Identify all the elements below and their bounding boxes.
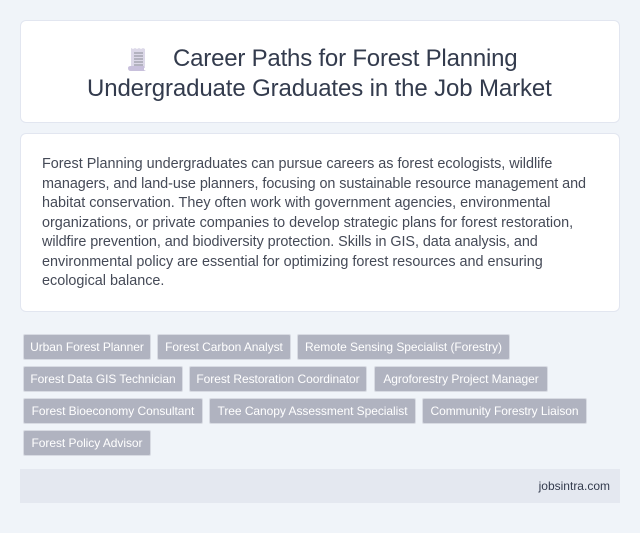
- tag: Agroforestry Project Manager: [383, 372, 539, 386]
- tag: [23, 366, 183, 392]
- tag: Forest Policy Advisor: [32, 436, 142, 450]
- tag: [374, 366, 548, 392]
- tag: Forest Bioeconomy Consultant: [32, 404, 194, 418]
- tags: career paths: [23, 334, 587, 456]
- text block: description: habitat conservation. They often work with government agencies, environmental: [42, 195, 550, 211]
- tag: [209, 398, 416, 424]
- text block: description: [42, 156, 586, 289]
- tag: Urban Forest Planner: [30, 340, 144, 354]
- text block: description: Forest Planning undergraduates can pursue careers as forest ecologists, wildlife: [42, 156, 552, 172]
- title: [87, 45, 552, 102]
- tag: [23, 334, 151, 360]
- tag: Remote Sensing Specialist (Forestry): [305, 340, 502, 354]
- tag: [189, 366, 367, 392]
- text block: description: environmental policy are essential for optimizing forest resources and ensuring: [42, 254, 543, 270]
- tag: [157, 334, 291, 360]
- text block: description: managers, and land-use planners, focusing on sustainable resource management and: [42, 176, 586, 192]
- text block: description: wildfire prevention, and biodiversity protection. Skills in GIS, data analysis, and: [42, 234, 538, 250]
- tag: [23, 398, 203, 424]
- icon: document scroll: [128, 48, 146, 71]
- tag: [297, 334, 510, 360]
- tag: Forest Restoration Coordinator: [196, 372, 360, 386]
- tag: Community Forestry Liaison: [430, 404, 579, 418]
- footer: [20, 469, 620, 503]
- panel: title card: [20, 20, 620, 123]
- tag: Forest Carbon Analyst: [165, 340, 283, 354]
- tag: Tree Canopy Assessment Specialist: [218, 404, 408, 418]
- tag: Forest Data GIS Technician: [30, 372, 176, 386]
- footer source text: jobsintra.com: [539, 479, 610, 493]
- title: Undergraduate Graduates in the Job Market: [87, 75, 552, 102]
- title: Career Paths for Forest Planning: [173, 45, 517, 72]
- text block: description: ecological balance.: [42, 273, 164, 289]
- tag: [422, 398, 587, 424]
- text block: description: organizations, or private companies to develop strategic plans for forest restoration,: [42, 214, 573, 230]
- panel: description: [20, 133, 620, 312]
- tag: [23, 430, 151, 456]
